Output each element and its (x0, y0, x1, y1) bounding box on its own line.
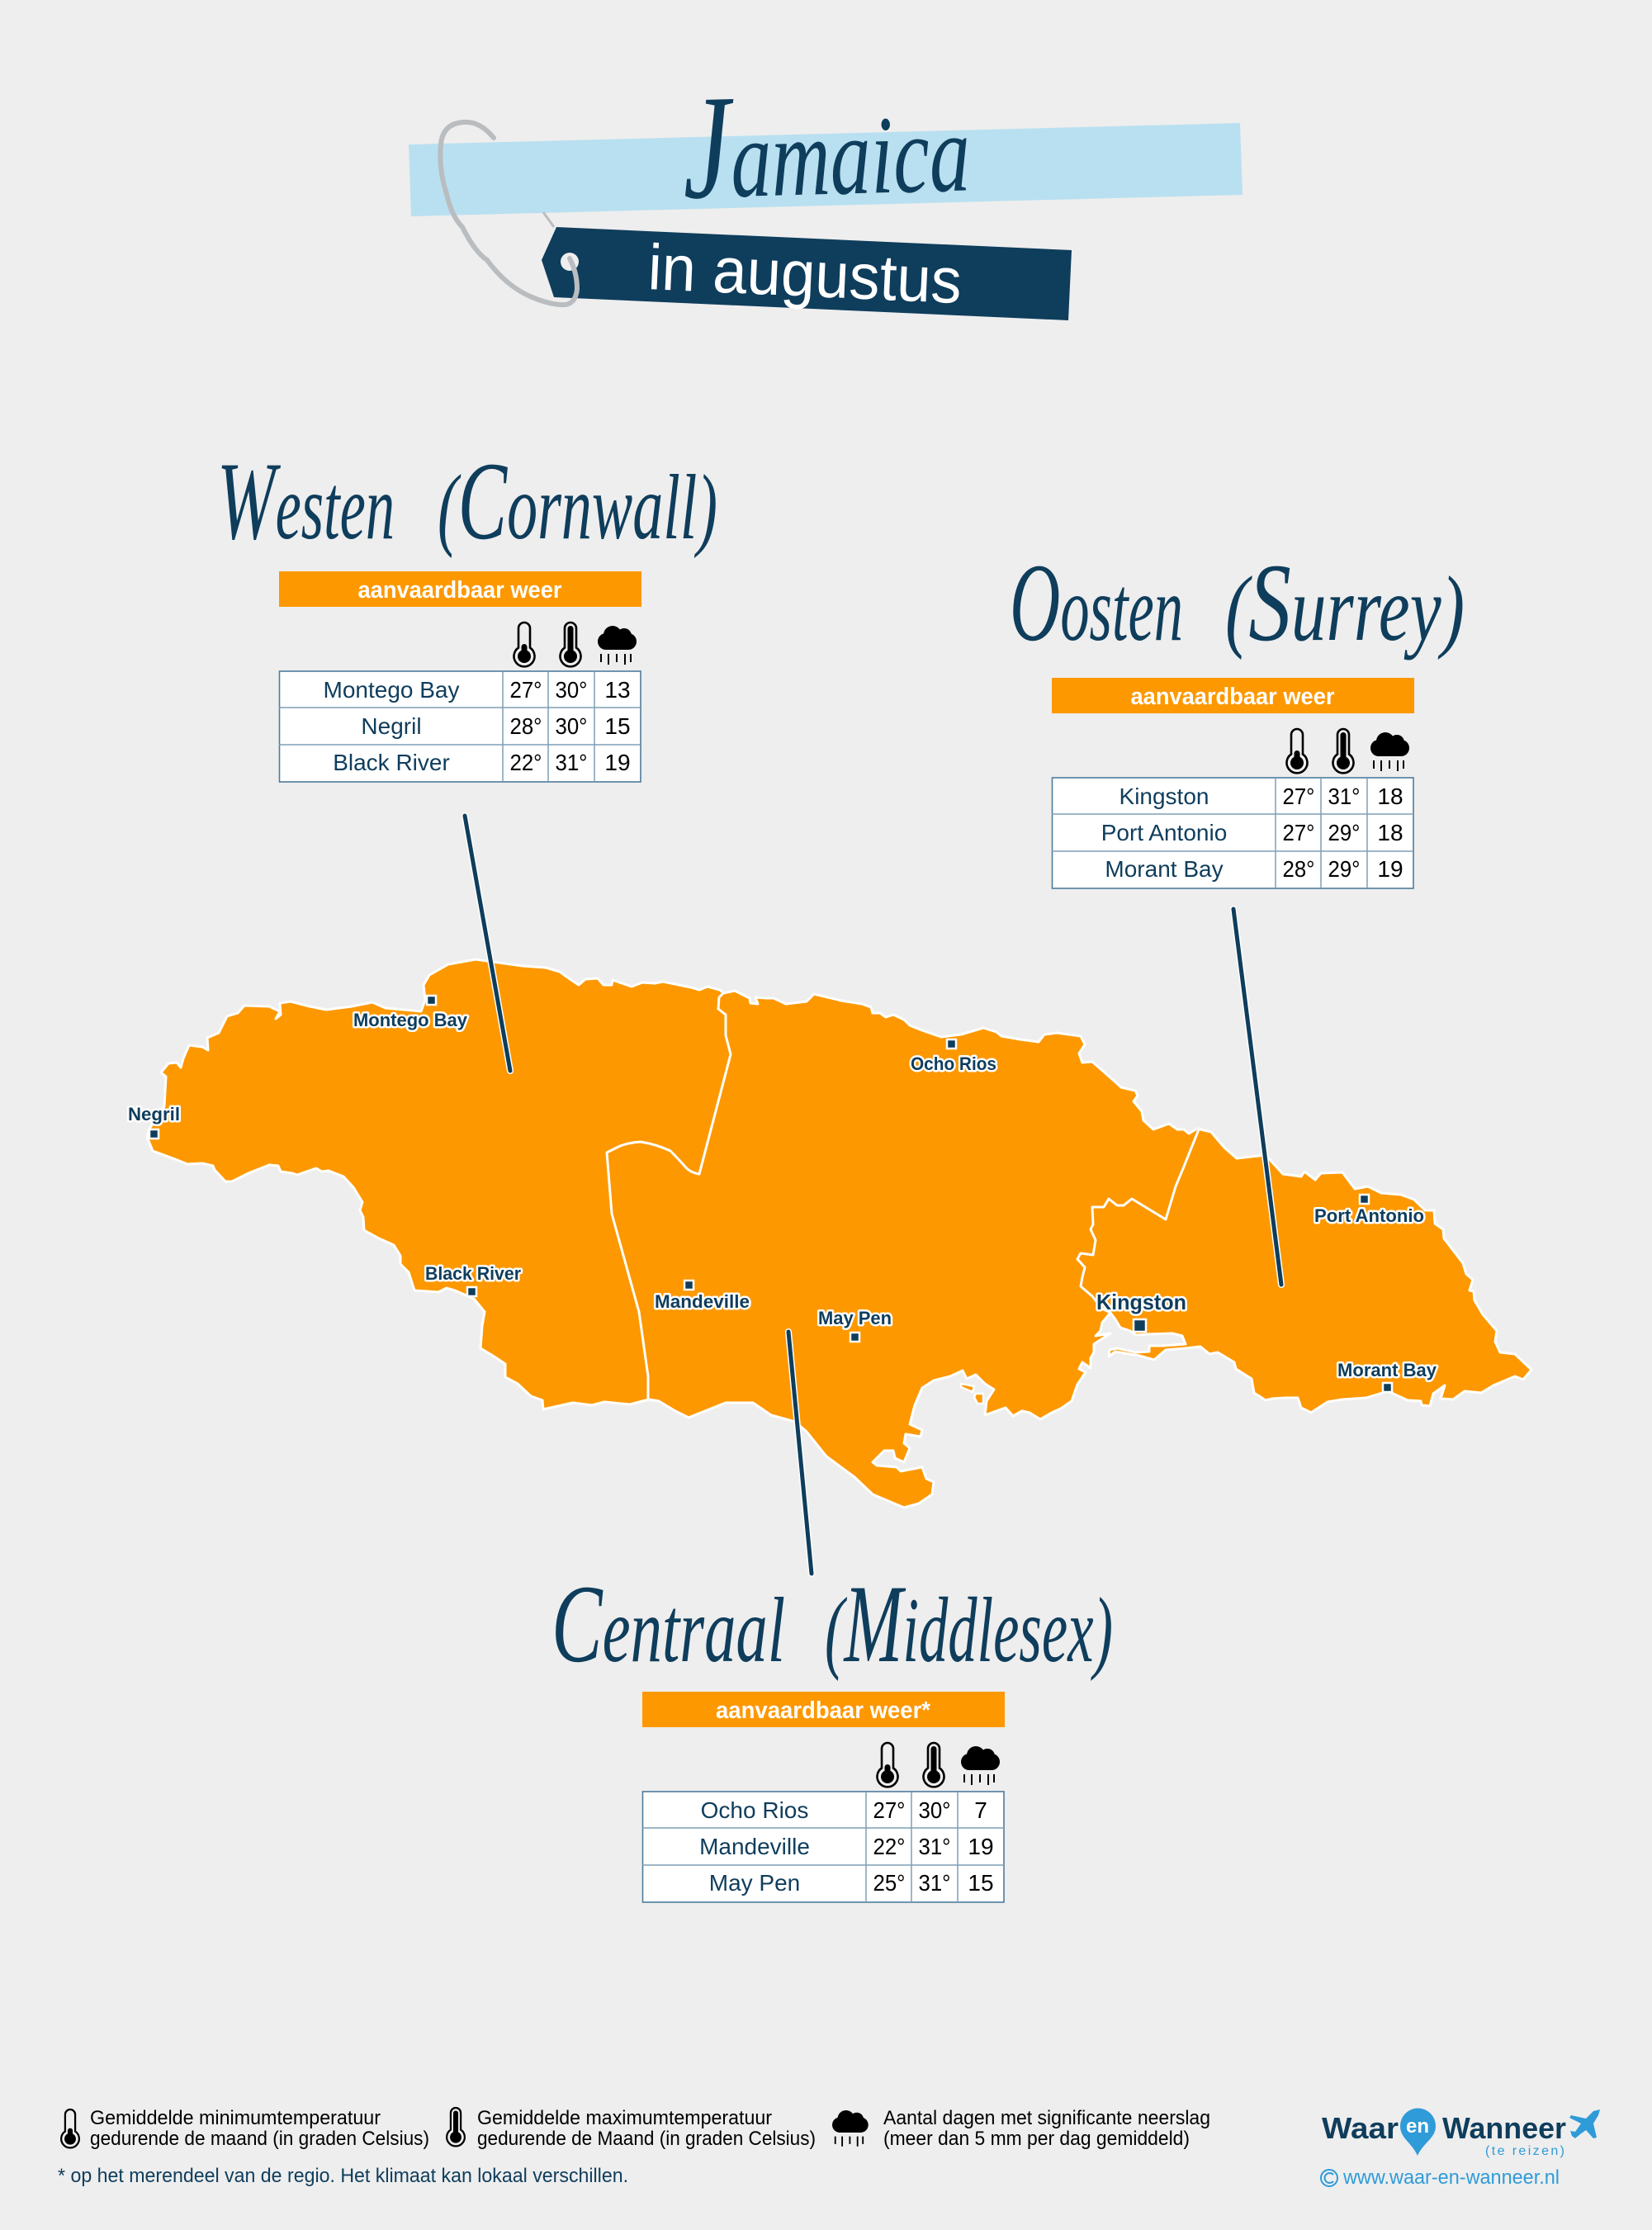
climate table: Montego Bay (324, 677, 459, 703)
panel: West (217, 440, 717, 782)
boundary west-central (607, 993, 731, 1399)
panel: East (1010, 542, 1465, 888)
climate table: May Pen (709, 1870, 800, 1896)
climate table (279, 671, 641, 782)
weather rating bar: aanvaardbaar weer (1131, 684, 1334, 710)
climate table: 13 (604, 677, 631, 703)
weather rating bar: aanvaardbaar weer (358, 577, 561, 604)
logo word: Waar: Waar (1322, 2111, 1399, 2145)
heading: Westen (Cornwall): Westen (217, 440, 395, 563)
climate table: 29° (1328, 856, 1361, 882)
climate table: 15 (604, 713, 631, 739)
logo word: Wanneer: Wanneer (1442, 2111, 1566, 2145)
city: Ocho Rios (911, 1039, 996, 1074)
climate table (642, 1792, 1004, 1902)
climate table: 27° (1283, 784, 1314, 809)
boundary central-east (1077, 1129, 1199, 1313)
legend: rain days: Aantal dagen met significante neerslag (883, 2107, 1210, 2129)
icon: rain cloud (1370, 732, 1409, 771)
logo: Waar en Wanneer (1321, 2109, 1600, 2189)
heading: Westen (Cornwall): (Cornwall) (438, 440, 717, 563)
icon: min temperature (1286, 729, 1308, 773)
climate table: 18 (1377, 784, 1403, 809)
climate table: Negril (361, 713, 422, 739)
heading: Oosten (Surrey) (1010, 542, 1465, 665)
climate table: Morant Bay (1105, 856, 1224, 882)
city: Mandeville (655, 1281, 750, 1312)
icon: max temperature (560, 623, 581, 666)
climate table: 31° (918, 1834, 951, 1859)
weather rating bar (642, 1692, 1005, 1727)
tag hole (561, 253, 579, 271)
city: Port Antonio (1314, 1195, 1424, 1226)
city: Negril: Negril (128, 1104, 180, 1124)
island outline (147, 959, 1531, 1508)
map of Jamaica (128, 816, 1531, 1574)
city: Montego Bay: Montego Bay (353, 1010, 468, 1030)
climate table: 18 (1377, 820, 1403, 845)
logo tagline: (te reizen) (1485, 2144, 1564, 2158)
city: Morant Bay: Morant Bay (1337, 1360, 1437, 1380)
subtitle: in augustus: in augustus (646, 230, 963, 317)
pointer line west (465, 816, 510, 1071)
city: Montego Bay (353, 996, 468, 1030)
city: Kingston: Kingston (1096, 1290, 1186, 1314)
climate table: 19 (604, 750, 631, 775)
climate table: 27° (510, 677, 542, 703)
climate table: Ocho Rios (701, 1797, 808, 1823)
climate table (1052, 778, 1413, 888)
climate table: 27° (1283, 820, 1314, 845)
icon: plane (1569, 2109, 1600, 2138)
climate table: 31° (555, 750, 588, 775)
climate table: 28° (1283, 856, 1314, 882)
climate table: 7 (974, 1797, 987, 1823)
climate table: 22° (873, 1834, 905, 1859)
climate table: Kingston (1119, 784, 1209, 809)
icon: max temperature (1332, 729, 1354, 773)
climate table: 15 (968, 1870, 994, 1896)
panel: Central (551, 1563, 1113, 1902)
copyright icon (1321, 2170, 1337, 2186)
footnote: * op het merendeel van de regio. Het klimaat kan lokaal verschillen. (58, 2165, 628, 2187)
climate table: Black River (333, 750, 450, 775)
city: May Pen: May Pen (818, 1308, 892, 1328)
climate table: 31° (1328, 784, 1361, 809)
legend: rain days (832, 2107, 1210, 2150)
climate table: 31° (918, 1870, 951, 1896)
logo pin text: en (1406, 2115, 1429, 2138)
weather rating bar (279, 571, 641, 607)
legend: minimum temperature (61, 2107, 429, 2150)
city: May Pen (818, 1308, 892, 1342)
heading: Oosten (Surrey): Oosten (1010, 542, 1183, 665)
legend: rain days: (meer dan 5 mm per dag gemiddeld) (883, 2128, 1190, 2150)
climate table: Mandeville (699, 1834, 810, 1859)
pointer line central (788, 1332, 812, 1574)
climate table: 28° (510, 713, 542, 739)
climate table: 30° (555, 677, 588, 703)
heading: Oosten (Surrey): (Surrey) (1225, 542, 1465, 665)
climate table: 29° (1328, 820, 1361, 845)
climate table: 30° (555, 713, 588, 739)
title: Jamaica: Jamaica (680, 58, 972, 230)
heading: Centraal (Middlesex): (Middlesex) (825, 1563, 1113, 1686)
logo pin (1400, 2109, 1436, 2156)
city: Port Antonio: Port Antonio (1314, 1205, 1424, 1226)
icon: min temperature (514, 623, 535, 666)
legend: maximum temperature (447, 2107, 816, 2150)
climate table: 27° (873, 1797, 905, 1823)
legend: minimum temperature: Gemiddelde minimumtemperatuur (90, 2107, 381, 2129)
legend: minimum temperature: gedurende de maand (in graden Celsius) (90, 2128, 429, 2150)
title band (409, 123, 1243, 216)
city: Mandeville: Mandeville (655, 1291, 750, 1312)
legend (58, 2107, 1210, 2187)
climate table: 22° (510, 750, 542, 775)
small islands in the bay (961, 1384, 983, 1404)
city: Black River (425, 1263, 521, 1296)
heading: Centraal (Middlesex): Centraal (551, 1563, 785, 1686)
climate table: 30° (918, 1797, 951, 1823)
subtitle tag (542, 227, 1072, 320)
heading: Centraal (Middlesex) (551, 1563, 1113, 1686)
climate table: 19 (968, 1834, 994, 1859)
legend: maximum temperature: gedurende de Maand (in graden Celsius) (477, 2128, 816, 2150)
heading: Westen (Cornwall) (217, 440, 717, 563)
icon: min temperature (877, 1743, 898, 1787)
title block (409, 58, 1243, 320)
city: Morant Bay (1337, 1360, 1437, 1392)
city: Ocho Rios: Ocho Rios (911, 1053, 996, 1074)
website url: www.waar-en-wanneer.nl (1342, 2166, 1560, 2189)
tag ring (440, 122, 577, 305)
icon: max temperature (923, 1743, 944, 1787)
climate table: 25° (873, 1870, 905, 1896)
weather rating bar: aanvaardbaar weer* (716, 1697, 931, 1724)
legend: maximum temperature: Gemiddelde maximumtemperatuur (477, 2107, 772, 2129)
climate table: 19 (1377, 856, 1403, 882)
weather rating bar (1052, 678, 1414, 713)
city: Kingston (1096, 1290, 1186, 1332)
icon: rain cloud (598, 626, 637, 665)
pointer line east (1233, 909, 1281, 1285)
city: Negril (128, 1104, 180, 1139)
climate table: Port Antonio (1101, 820, 1227, 845)
string of the tag (543, 212, 554, 227)
icon: rain cloud (961, 1746, 1000, 1785)
city: Black River: Black River (425, 1263, 521, 1284)
